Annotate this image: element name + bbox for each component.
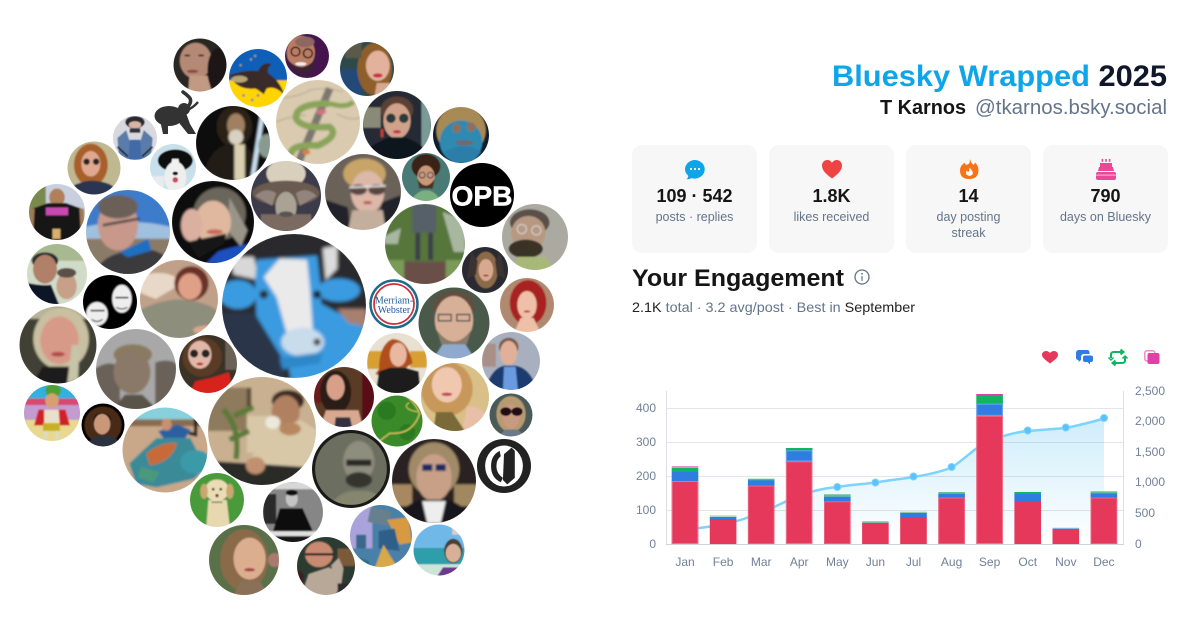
avatar: cartoon Roman king	[23, 384, 81, 442]
avatar: smiling woman outdoors	[208, 524, 282, 596]
right axis labels: 0	[1135, 537, 1142, 551]
right axis labels: 1,000	[1135, 475, 1165, 489]
avatar: woman in dark sunglasses	[489, 393, 533, 437]
right axis labels: 1,500	[1135, 445, 1165, 459]
avatar: blue painted cow statue (largest)	[219, 231, 369, 381]
bar: Jun	[862, 521, 889, 544]
avatar: river through green forest	[370, 394, 424, 448]
avatar: OPB logo	[449, 162, 515, 228]
avatar: red-haired woman in glasses	[66, 140, 122, 196]
month labels: Feb	[713, 555, 734, 569]
panel: posting streak stat card: streak	[951, 226, 986, 240]
user name and handle	[880, 97, 1167, 119]
avatar: curly-haired man	[401, 152, 451, 202]
panel: posts and replies stat card	[632, 145, 757, 253]
avatar: Merriam-Webster logo: Webster	[378, 305, 411, 316]
bar: Apr	[786, 448, 812, 544]
axes and gridlines	[666, 391, 1124, 544]
avatar: woman with grey streaked hair	[170, 179, 256, 265]
bar: Sep	[976, 394, 1003, 544]
avatar: bald man with glasses	[284, 33, 330, 79]
heading: Your Engagement: Your Engagement	[632, 265, 844, 292]
icon: info	[855, 270, 869, 284]
avatar: couple selfie	[26, 243, 88, 305]
icon: birthday cake	[1096, 159, 1116, 180]
bar: Nov	[1052, 528, 1079, 544]
month labels: Dec	[1093, 555, 1115, 569]
avatar: woman with red hair	[499, 277, 555, 333]
avatar: Merriam-Webster logo	[368, 278, 420, 330]
left axis labels	[636, 401, 656, 551]
avatar: black and white film still	[262, 481, 324, 543]
avatar: sci-fi robot painting	[349, 504, 413, 568]
icon: elephant silhouette	[154, 92, 198, 134]
right axis labels: 2,500	[1135, 384, 1165, 398]
panel: posting streak stat card	[906, 145, 1031, 253]
avatar: blonde curly woman	[420, 362, 490, 432]
right axis labels	[1135, 384, 1165, 551]
left axis labels: 300	[636, 435, 656, 449]
avatar: blonde woman selfie in car	[18, 305, 98, 385]
panel: likes received stat card	[769, 145, 894, 253]
icon: reposts legend arrows	[1108, 350, 1128, 366]
avatar: man in cap	[94, 327, 178, 411]
icon: quotes legend squares	[1145, 351, 1160, 364]
user name and handle: T Karnos	[880, 97, 966, 119]
bar: Mar	[748, 479, 774, 544]
month labels: Sep	[979, 555, 1001, 569]
month labels: Aug	[941, 555, 962, 569]
bar: Aug	[938, 492, 965, 544]
left axis labels: 0	[649, 537, 656, 551]
panel: likes received stat card: 1.8K	[812, 186, 851, 206]
month labels: Jul	[906, 555, 921, 569]
avatar: bronze statue among trees	[383, 202, 467, 286]
month labels: Apr	[790, 555, 809, 569]
avatar: border collie dog	[150, 144, 196, 190]
cumulative points	[834, 414, 1108, 490]
panel: days on Bluesky stat card: 790	[1090, 186, 1121, 206]
title: Bluesky Wrapped 2025	[832, 60, 1167, 93]
icon: likes legend heart	[1042, 351, 1058, 364]
avatar: man in black shirt with lanyard	[28, 183, 86, 241]
avatar: robed Jedi with lightsaber	[196, 106, 270, 180]
panel: days on Bluesky stat card	[1043, 145, 1168, 253]
avatar: person hiding behind sweater	[112, 115, 158, 161]
panel: days on Bluesky stat card: days on Bluesky	[1060, 210, 1152, 224]
month labels: Mar	[751, 555, 772, 569]
engagement summary: 2.1K total · 3.2 avg/post · Best in September	[632, 299, 915, 315]
avatar: OPB logo: OPB	[451, 180, 513, 211]
bar: Jul	[900, 512, 927, 544]
avatar: red-haired woman in black tee	[366, 332, 428, 394]
left axis labels: 200	[636, 469, 656, 483]
cumulative area	[685, 418, 1104, 544]
avatar: woman with long hair	[461, 246, 509, 294]
avatar: woman lying on colourful quilt on beach	[121, 406, 211, 494]
avatar: woman close-up	[172, 37, 229, 93]
avatar: man portrait on dark ring	[81, 403, 125, 447]
avatar: woman with glasses and bookshelf	[362, 90, 432, 160]
avatar: person with curly hair and blue glasses	[390, 437, 478, 525]
panel: posts and replies stat card: posts · replies	[656, 210, 733, 224]
month labels: Nov	[1055, 555, 1076, 569]
avatar: smiling man in navy jacket	[481, 331, 541, 391]
avatar: woman in glasses and red dress	[178, 334, 238, 394]
icon: heart	[822, 160, 842, 178]
bar: Jan	[672, 466, 698, 544]
avatar: bearded man with glasses looking down	[501, 203, 569, 271]
month labels: May	[826, 555, 849, 569]
right axis labels: 500	[1135, 506, 1155, 520]
month labels: Jun	[866, 555, 885, 569]
avatar: smiling brunette	[313, 366, 375, 428]
cumulative line	[685, 418, 1104, 530]
panel: posts and replies stat card: 109 · 542	[656, 186, 732, 206]
avatar: tintype portrait of bald man	[310, 428, 392, 510]
stacked bars	[672, 394, 1117, 544]
icon: replies legend bubbles	[1076, 350, 1093, 364]
bar: May	[824, 494, 851, 544]
left axis labels: 100	[636, 503, 656, 517]
left axis labels: 400	[636, 401, 656, 415]
avatar: man holding a cat	[288, 536, 356, 596]
bar: Dec	[1091, 491, 1117, 544]
avatar: orca on Ukrainian flag	[228, 48, 288, 108]
chart legend icons	[1042, 350, 1160, 366]
bar: Oct	[1014, 492, 1041, 544]
icon: chat bubble	[685, 160, 705, 179]
avatar: snake and sword drawing	[274, 78, 362, 166]
avatar: man with glasses under blue sky	[84, 188, 172, 276]
avatar: man with glasses and goatee	[417, 286, 491, 360]
right axis labels: 2,000	[1135, 414, 1165, 428]
avatar: horned sheep creature	[250, 160, 322, 232]
avatar: blackletter O logo	[476, 438, 532, 494]
avatar: woman in bed with pillow	[138, 258, 221, 340]
month labels	[675, 555, 1115, 569]
avatar: blue furry monster	[432, 106, 490, 164]
avatar: blonde woman in white sunglasses	[323, 152, 403, 232]
avatar cloud	[18, 33, 569, 596]
avatar: man drinking coffee in cafe	[206, 375, 318, 487]
avatar: black and white comic faces	[82, 274, 138, 330]
panel: posting streak stat card: 14	[958, 186, 979, 206]
panel: posting streak stat card: day posting	[937, 210, 1001, 224]
month labels: Oct	[1018, 555, 1038, 569]
month labels: Jan	[675, 555, 695, 569]
bar: Feb	[710, 515, 736, 544]
avatar: woman at seaside	[412, 523, 466, 577]
panel: likes received stat card: likes received	[794, 210, 869, 224]
bar and line chart	[636, 384, 1165, 569]
icon: flame	[960, 159, 978, 179]
avatar: golden retriever puppy	[189, 472, 245, 528]
avatar: Merriam-Webster logo: Merriam-	[375, 296, 413, 306]
user name and handle: @tkarnos.bsky.social	[975, 97, 1167, 119]
avatar: smiling woman with wavy hair	[339, 41, 395, 97]
